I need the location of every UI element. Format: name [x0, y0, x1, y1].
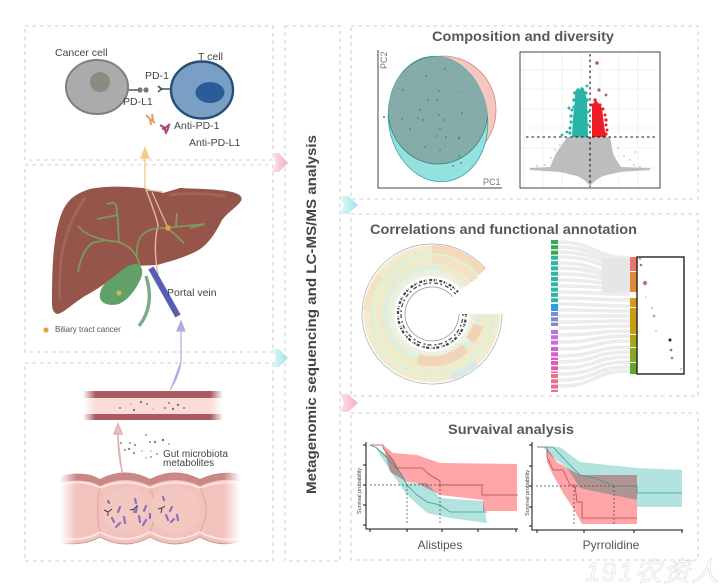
axis label: Survival probability — [525, 470, 531, 516]
chart: circular heatmap — [362, 244, 502, 384]
panel: correlations and functional annotation — [351, 214, 698, 396]
enrichment dot plot — [637, 257, 684, 374]
watermark: 191农资人 — [585, 557, 720, 587]
arrow: pink to centre panel — [272, 153, 288, 172]
icon: anti-PD-L1 antibody — [160, 124, 170, 134]
label: PD-L1: PD-L1 — [123, 96, 153, 108]
chart: Alistipes survival curve — [357, 442, 518, 552]
panel: analysis method — [285, 26, 340, 561]
orange sectors — [432, 249, 482, 272]
heading: correlations: Correlations and functional annotation — [370, 221, 637, 237]
arrow: pink to survival — [340, 394, 358, 412]
chart: sankey — [551, 240, 684, 392]
label: anti-PD-L1: Anti-PD-L1 — [189, 137, 241, 149]
label: PC2: PC2 — [379, 51, 389, 69]
red points — [590, 98, 608, 137]
spokes — [367, 249, 497, 379]
heading: method: Metagenomic sequencing and LC-MS/MS analysis — [303, 135, 319, 494]
dendrogram — [398, 280, 466, 348]
teal points — [561, 85, 590, 137]
label: cancer cell: Cancer cell — [55, 47, 108, 59]
arrow: yellow up to immune cells — [141, 148, 149, 188]
legend: biliary tract cancer: Biliary tract cancer — [55, 325, 121, 334]
label: Alistipes: Alistipes — [418, 538, 462, 552]
label: PD-1: PD-1 — [145, 70, 169, 82]
chart: PCA ellipses — [378, 50, 502, 188]
panel: survival analysis — [351, 413, 698, 560]
icon: blood vessel — [83, 391, 223, 420]
heading: survival: Survaival analysis — [448, 421, 574, 437]
label: gut microbiota metabolites: Gut microbiota — [163, 449, 228, 460]
label: gut microbiota metabolites: metabolites — [163, 458, 214, 469]
label: gut microbiota metabolites — [163, 449, 228, 469]
chart: volcano plot — [520, 52, 660, 188]
arrow: purple up to portal vein — [170, 321, 185, 390]
heading: composition: Composition and diversity — [432, 28, 614, 44]
label: PC1: PC1 — [483, 177, 501, 187]
icon: metabolites — [120, 434, 170, 459]
chart: Pyrrolidine survival curve — [525, 442, 683, 552]
flows — [558, 242, 630, 386]
icon: cancer cell — [66, 60, 149, 114]
axis label: Survival probability — [357, 468, 363, 514]
gallbladder — [100, 264, 142, 305]
icon: T cell — [158, 62, 233, 118]
bile duct trunk — [139, 276, 149, 326]
panel: composition and diversity — [351, 26, 698, 199]
tumour — [165, 225, 171, 231]
icon: portal vein — [151, 268, 178, 316]
panel: immune checkpoint — [25, 26, 273, 160]
right category bar — [630, 257, 637, 374]
icon: liver — [52, 187, 242, 326]
panel: gut — [25, 363, 273, 561]
bile ducts — [78, 202, 205, 272]
label: anti-PD-1: Anti-PD-1 — [174, 120, 220, 132]
arrow: metabolites into blood — [114, 424, 123, 475]
ligament — [145, 187, 158, 275]
panel: liver — [25, 165, 273, 352]
grey points — [530, 137, 650, 187]
icon: anti-PD-1 antibody — [146, 114, 155, 125]
arrow: cyan to centre panel — [272, 349, 288, 367]
label: Pyrrolidine: Pyrrolidine — [583, 538, 640, 552]
label: portal vein: Portal vein — [167, 287, 217, 299]
left category bar — [551, 240, 558, 392]
arrow: cyan to composition — [340, 196, 358, 214]
icon: intestine — [60, 472, 240, 544]
label: T cell: T cell — [198, 51, 223, 63]
